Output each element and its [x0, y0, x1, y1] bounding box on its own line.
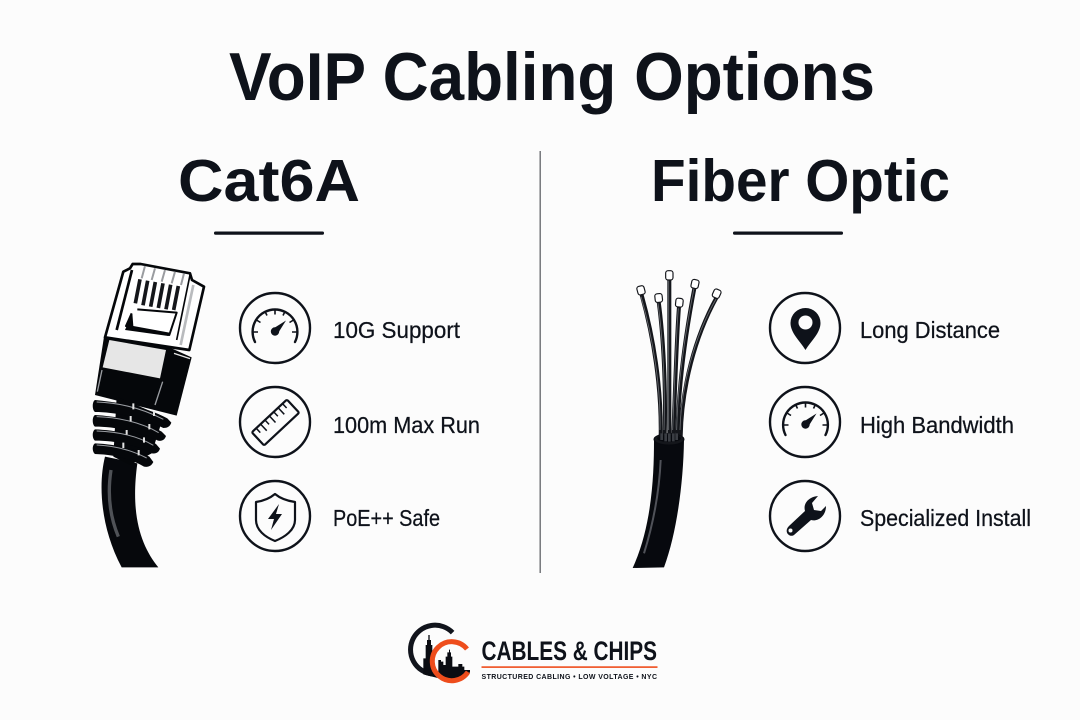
feature: 100m Max Run [240, 387, 480, 457]
feature: 10G Support: 10G Support [333, 317, 461, 343]
icon: ruler [240, 387, 310, 457]
icon: gauge [240, 293, 310, 363]
illustration: fiber strands and cable [633, 271, 722, 568]
feature: Long Distance [770, 293, 1000, 363]
title: VoIP Cabling Options [229, 39, 875, 115]
feature: 10G Support [240, 293, 461, 363]
feature: 100m Max Run: 100m Max Run [333, 412, 480, 438]
logo: Cables & Chips [411, 625, 658, 681]
icon: shield with bolt [240, 481, 310, 551]
feature: Specialized Install [770, 481, 1031, 551]
icon: wrench [770, 481, 840, 551]
logo mark: C rings and skyline [411, 625, 470, 681]
feature: PoE++ Safe: PoE++ Safe [333, 505, 440, 531]
feature: High Bandwidth: High Bandwidth [860, 412, 1014, 438]
feature: High Bandwidth [770, 387, 1014, 457]
icon: gauge [770, 387, 840, 457]
feature: Long Distance: Long Distance [860, 317, 1000, 343]
heading: Cat6A: Cat6A [178, 148, 360, 214]
feature: Specialized Install: Specialized Install [860, 505, 1031, 531]
feature: PoE++ Safe [240, 481, 440, 551]
panel: Cat6A [93, 148, 480, 567]
heading: Fiber Optic: Fiber Optic [651, 148, 950, 214]
illustration: RJ45 connector [93, 264, 204, 567]
logo tagline: STRUCTURED CABLING • LOW VOLTAGE • NYC [482, 674, 657, 681]
logo wordmark: CABLES & CHIPS [482, 636, 657, 666]
icon: location pin [770, 293, 840, 363]
panel: Fiber Optic [633, 148, 1031, 568]
